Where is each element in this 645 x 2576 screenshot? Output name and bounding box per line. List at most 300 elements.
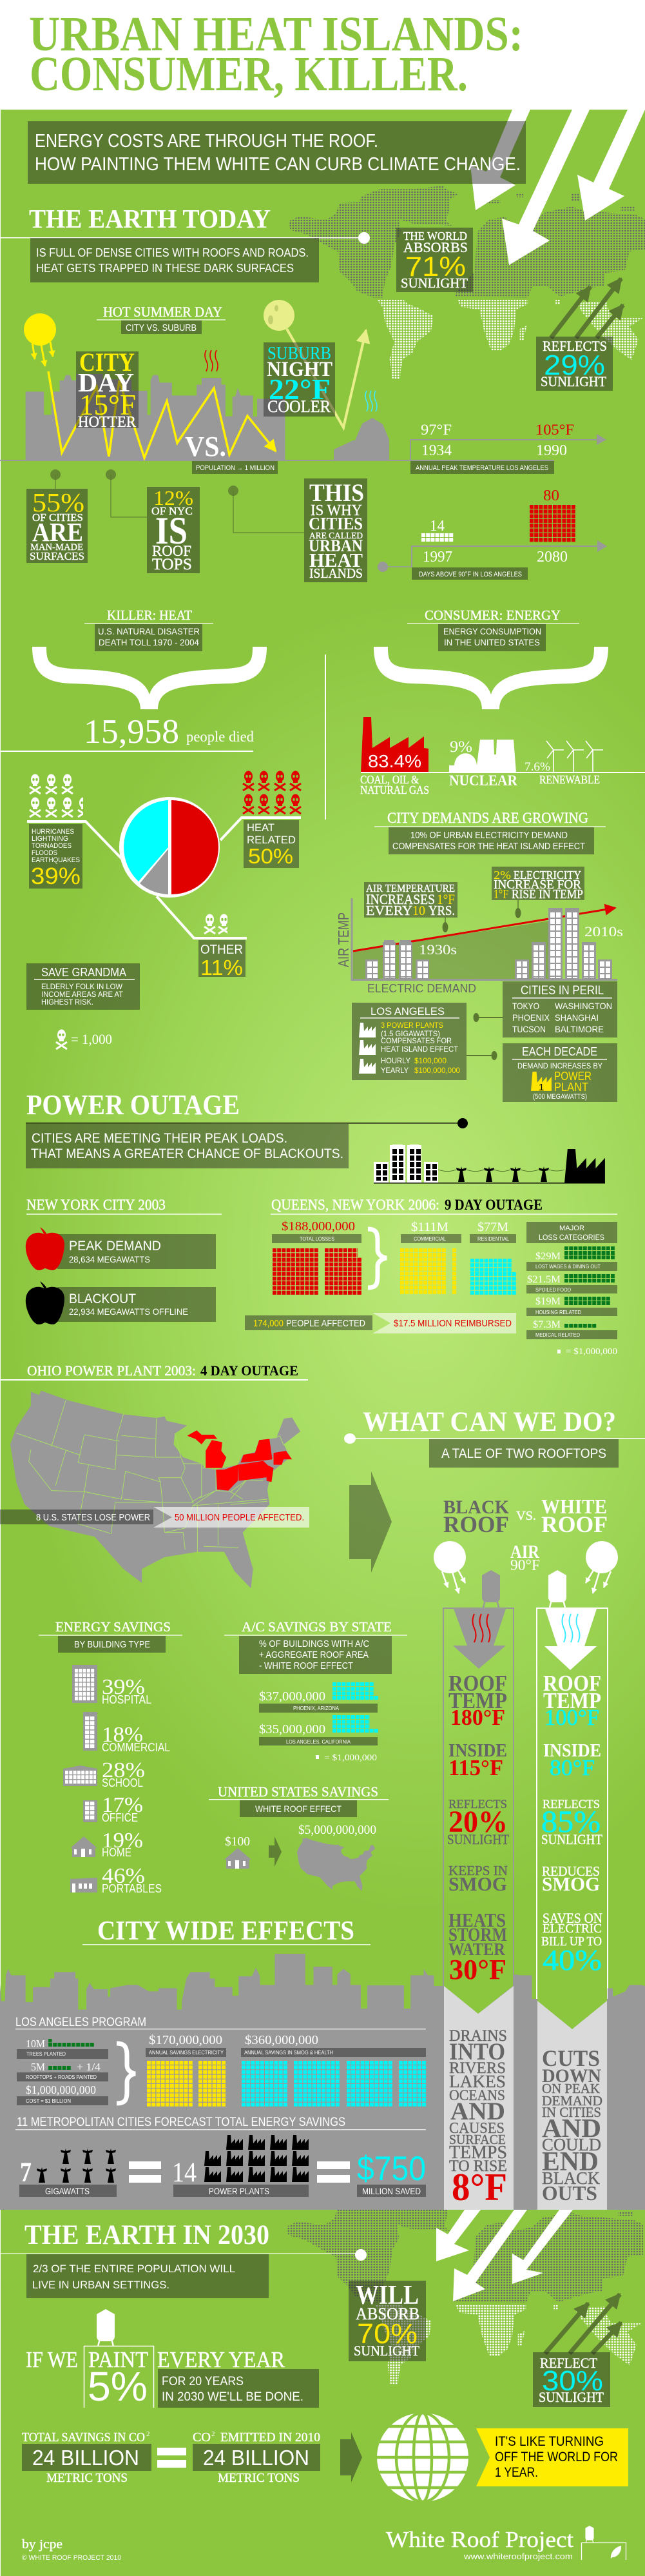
black roof stats: REFLECTS: [448, 1798, 507, 1811]
statement: if we paint 5% every year: PAINT: [88, 2347, 148, 2372]
text: vs: VS.: [185, 431, 226, 462]
panel: major loss categories: $29M: [535, 1251, 561, 1262]
callout: heat related 50%: 50%: [248, 845, 293, 868]
panel: killer heat heading: DEATH TOLL 1970 - 2004: [99, 637, 199, 647]
black roof stats: STORM: [448, 1924, 507, 1945]
white roof stats: REFLECTS: [543, 1798, 600, 1811]
chart: los angeles savings: [259, 1715, 378, 1745]
million saved: $750: [357, 2150, 426, 2188]
heading: hot summer day: CITY VS. SUBURB: [126, 322, 197, 333]
panel: energy savings heading: BY BUILDING TYPE: [74, 1639, 150, 1650]
panel: power outage text: THAT MEANS A GREATER CHANCE OF BLACKOUTS.: [31, 1146, 343, 1161]
chart: days above 90F: 80: [543, 487, 559, 504]
icon: sun over white roof: [586, 1541, 618, 1593]
callout: electricity increase: INCREASE FOR: [494, 878, 582, 892]
callout: reflect 30%: SUNLIGHT: [539, 2389, 604, 2405]
callout: people affected: [245, 1315, 372, 1330]
stat: people died: people died: [186, 729, 254, 745]
panel: major loss categories: MEDICAL RELATED: [535, 1332, 580, 1338]
panel: 11 metropolitan cities: [15, 2116, 426, 2197]
white roof stats: SAVES ON: [543, 1910, 602, 1926]
intro banner: [28, 121, 526, 184]
icon: power grid skyline: [374, 1145, 605, 1184]
smog and health savings grid: $360,000,000: [245, 2033, 318, 2047]
chart: annual peak temperature: 97°F: [421, 422, 452, 438]
white roof runoff text: AND: [542, 2113, 601, 2143]
connectors and dots: [50, 469, 304, 533]
heading: queens 2006: [271, 1197, 617, 1215]
callout: reflect 30%: 30%: [542, 2365, 603, 2397]
stat: office: OFFICE: [102, 1811, 138, 1824]
logo: white roof project: White Roof Project: [386, 2527, 573, 2552]
panel: power outage text: [26, 1124, 349, 1168]
white roof stats: REDUCES: [542, 1863, 600, 1879]
panel: los angeles: LOS ANGELES: [371, 1005, 445, 1018]
callout: world absorbs 71%: THE WORLD: [403, 230, 467, 242]
callout: city day: 15°F: [79, 388, 136, 421]
panel: consumer energy heading: ENERGY CONSUMPTION: [443, 626, 541, 636]
callout: electricity increase: RISE IN TEMP: [512, 887, 583, 901]
icon: brace: [117, 2043, 135, 2103]
panel: power outage text: CITIES ARE MEETING THEIR PEAK LOADS.: [32, 1131, 287, 1146]
callout: 12% of NYC: IS: [155, 509, 188, 552]
stat: commercial: COMMERCIAL: [102, 1741, 170, 1754]
panel: A/C savings heading: % OF BUILDINGS WITH A/C: [259, 1638, 369, 1649]
map: united states blackout: [10, 1391, 300, 1588]
stat: CO2 emitted: METRIC TONS: [218, 2471, 300, 2485]
electricity savings grid: [146, 2033, 226, 2107]
white roof runoff text: DOWN: [542, 2065, 601, 2087]
callout: 55% of cities: [26, 487, 88, 563]
icon: gray water tower: [482, 1570, 500, 1608]
stat: school: SCHOOL: [102, 1776, 143, 1789]
callout: this is why: HEAT: [309, 549, 363, 571]
panel: major loss categories: HOUSING RELATED: [535, 1310, 581, 1315]
black roof stats: SMOG: [448, 1873, 507, 1895]
callout: will absorb 70%: 70%: [357, 2318, 418, 2350]
callout: will absorb 70%: [349, 2281, 426, 2361]
black roof stats: 115°F: [448, 1755, 503, 1780]
callout: this is why: IS WHY: [311, 502, 362, 519]
white roof runoff text: CUTS: [542, 2045, 600, 2071]
dotted world map: 2030: [286, 2191, 643, 2384]
chart: phoenix savings: $37,000,000: [259, 1689, 325, 1704]
callout: 50 million: [153, 1507, 309, 1528]
callout: heat related 50%: HEAT: [247, 821, 274, 834]
heading: ohio power plant: OHIO POWER PLANT 2003:: [27, 1362, 196, 1379]
house: [334, 418, 389, 460]
callout: 55% of cities: 55%: [32, 487, 84, 517]
gigawatts: [19, 2148, 117, 2197]
icon: left curly brace: [32, 647, 267, 709]
gigawatts: GIGAWATTS: [45, 2186, 90, 2196]
icon: red factory 83.4%: 83.4%: [368, 751, 421, 771]
panel: cities in peril: BALTIMORE: [555, 1024, 604, 1034]
icon: wind turbines: [546, 741, 603, 772]
buildings 2010s: [515, 908, 612, 979]
panel: cities in peril: TOKYO: [512, 1001, 539, 1011]
icon: incoming sunlight arrows: [470, 110, 645, 265]
panel: blackout: 22,934 MEGAWATTS OFFLINE: [69, 1306, 188, 1317]
icon: white water tower: [548, 1570, 566, 1608]
power plants: 14: [172, 2158, 197, 2188]
panel: tale of two rooftops: A TALE OF TWO ROOFTOPS: [441, 1446, 606, 1461]
trees planted: TREES PLANTED: [26, 2050, 66, 2057]
callout: reflects 29%: SUNLIGHT: [541, 373, 607, 389]
chart: los angeles savings: LOS ANGELES, CALIFORNIA: [286, 1739, 351, 1745]
callout: reflects 29%: [536, 337, 613, 391]
panel: cities in peril: WASHINGTON: [555, 1001, 612, 1011]
callout: this is why: [304, 478, 367, 582]
black roof runoff text: OCEANS: [449, 2087, 505, 2103]
label: 7.6%: 7.6%: [525, 760, 550, 774]
energy source labels: NUCLEAR: [449, 772, 517, 789]
legend: queens unit: = $1,000,000: [566, 1347, 617, 1357]
callout: city day: CITY: [79, 348, 135, 377]
callout: suburb night: NIGHT: [267, 358, 332, 381]
black roof runoff text: LAKES: [449, 2072, 506, 2091]
panel: peak demand: 28,634 MEGAWATTS: [69, 1254, 150, 1264]
smog and health savings grid: ANNUAL SAVINGS IN SMOG & HEALTH: [244, 2049, 333, 2056]
white roof runoff text: OUTS: [542, 2181, 597, 2205]
callout: people affected: 174,000: [253, 1318, 284, 1329]
title: CONSUMER, KILLER.: [30, 47, 468, 101]
panel: save grandma: [26, 963, 140, 1010]
panel: united states savings: $100: [225, 1834, 250, 1849]
trees planted: [17, 2038, 108, 2059]
callout: natural disasters 39%: EARTHQUAKES: [32, 856, 80, 864]
callout: natural disasters 39%: LIGHTNING: [32, 835, 68, 843]
ground line: [0, 460, 554, 461]
callout: turning off the world: [476, 2428, 628, 2486]
rooftops painted: [17, 2061, 108, 2081]
title: [29, 7, 523, 101]
stat: portables: PORTABLES: [102, 1882, 162, 1895]
legend: skull equals 1,000: [56, 1029, 112, 1049]
energy source labels: NATURAL GAS: [360, 783, 429, 796]
callout: this is why: THIS: [309, 479, 364, 507]
intro banner: HOW PAINTING THEM WHITE CAN CURB CLIMATE CHANGE.: [35, 154, 521, 175]
panel: 2/3 of population: [26, 2254, 269, 2298]
panel: cities in peril: TUCSON: [512, 1024, 546, 1034]
chart: residential losses: [470, 1220, 517, 1295]
black roof runoff text: 8°F: [452, 2166, 507, 2208]
panel: each decade: EACH DECADE: [522, 1045, 597, 1058]
callout: reimbursed: [372, 1313, 516, 1333]
callout: suburb night: COOLER: [267, 397, 331, 416]
panel: for 20 years: IN 2030 WE'LL BE DONE.: [162, 2390, 303, 2404]
stat: commercial: 18%: [102, 1723, 143, 1747]
callout: 8 states: [0, 1509, 153, 1524]
suburb reflection line: [287, 329, 366, 428]
callout: air temperature: 1°F: [437, 891, 455, 907]
panel: los angeles: $100,000,000: [414, 1066, 460, 1075]
stat: CO2 emitted: [193, 2430, 320, 2485]
panel: A/C savings heading: + AGGREGATE ROOF AREA: [259, 1649, 369, 1660]
callout: people affected: PEOPLE AFFECTED: [286, 1318, 365, 1329]
panel: earth today text: HEAT GETS TRAPPED IN THESE DARK SURFACES: [36, 262, 294, 275]
stat: CO2 emitted: CO: [193, 2430, 211, 2444]
black roof stats: TEMP: [448, 1688, 507, 1713]
panel: major loss categories: LOST WAGES & DINING OUT: [535, 1264, 601, 1270]
heat squiggles: suburb: [365, 391, 377, 411]
chart: days above 90F: DAYS ABOVE 90°F IN LOS ANGELES: [419, 571, 522, 578]
white roof runoff text: [542, 2045, 602, 2205]
chart: annual peak temperature: ANNUAL PEAK TEMPERATURE LOS ANGELES: [416, 464, 548, 472]
callout: 8 states: 8 U.S. STATES LOSE POWER: [36, 1512, 150, 1523]
callout: turning off the world: IT'S LIKE TURNING: [495, 2434, 604, 2449]
white roof stats: 100°F: [544, 1705, 599, 1730]
white roof stats: SMOG: [542, 1873, 600, 1895]
callout: air temperature: INCREASES: [366, 891, 435, 907]
callout: will absorb 70%: SUNLIGHT: [354, 2343, 420, 2359]
chart: queens total losses: $188,000,000: [282, 1219, 355, 1234]
heat squiggles: city: [205, 350, 218, 371]
white roof runoff text: IN CITIES: [542, 2104, 601, 2120]
heading: black vs white roof: ROOF: [541, 1511, 608, 1537]
credits: by jcpe: [22, 2537, 63, 2551]
label: air 90F: [510, 1542, 540, 1574]
black roof stats: ROOF: [448, 1671, 507, 1696]
stat: total savings: [22, 2430, 151, 2485]
callout: 12% of NYC: 12%: [153, 486, 193, 509]
callout: 55% of cities: SURFACES: [30, 550, 84, 562]
trees planted: 10M: [26, 2038, 45, 2050]
icon: reflected sunlight arrows: [551, 279, 623, 338]
icon: red factory 83.4%: [361, 717, 428, 772]
icon: sun: [24, 313, 56, 366]
vertical divider: [325, 654, 326, 820]
callout: natural disasters 39%: TORNADOES: [32, 842, 72, 850]
panel: los angeles: HEAT ISLAND EFFECT: [381, 1045, 459, 1054]
panel: 2/3 of population: LIVE IN URBAN SETTINGS.: [32, 2279, 169, 2291]
panel: cities in peril: PHOENIX: [512, 1012, 550, 1023]
white roof stats: BILL UP TO: [541, 1934, 602, 1949]
callout: air temperature: YRS.: [428, 903, 455, 918]
stat: commercial: [83, 1712, 170, 1754]
stat: people died: 15,958: [84, 713, 179, 751]
callout: this is why: ARE CALLED: [309, 531, 363, 541]
callout: 12% of NYC: OF NYC: [151, 505, 193, 517]
heading: queens 2006: 9 DAY OUTAGE: [445, 1197, 543, 1213]
white roof stats: ELECTRIC: [543, 1922, 602, 1936]
black roof runoff column: [444, 1960, 514, 2210]
heading: the earth today: THE EARTH TODAY: [29, 204, 271, 233]
heading: ohio power plant: [0, 1362, 308, 1381]
legend: A/C unit: = $1,000,000: [324, 1753, 377, 1763]
icon: moon: [264, 300, 294, 331]
panel: los angeles program: [15, 2016, 427, 2107]
callout: turning off the world: 1 YEAR.: [495, 2465, 538, 2480]
energy source labels: [360, 772, 600, 796]
panel: major loss categories: $21.5M: [527, 1274, 561, 1285]
stat: portables: 46%: [102, 1864, 145, 1888]
chart: air temp vs electric demand: [335, 898, 623, 995]
heading: black vs white roof: WHITE: [541, 1495, 607, 1518]
panel: each decade: 1: [539, 1082, 544, 1093]
program cost: COST = $1 BILLION: [26, 2098, 71, 2104]
chart: residential losses: RESIDENTIAL: [477, 1236, 510, 1242]
stat: total savings: METRIC TONS: [46, 2471, 128, 2485]
program cost: $1,000,000,000: [26, 2083, 96, 2096]
stat: hospital: HOSPITAL: [102, 1693, 151, 1706]
heat squiggles black roof: [473, 1614, 490, 1642]
panel: los angeles: $100,000: [414, 1056, 447, 1065]
callout: air temperature: [364, 882, 457, 932]
panel: 2/3 of population: 2/3 OF THE ENTIRE POPULATION WILL: [33, 2263, 235, 2275]
panel: killer heat heading: U.S. NATURAL DISASTER: [98, 626, 200, 636]
panel: earth today text: IS FULL OF DENSE CITIES WITH ROOFS AND ROADS.: [36, 246, 309, 259]
rule with dot: [26, 1118, 468, 1128]
black roof stats: 30°F: [449, 1954, 506, 1985]
label: air 90F: AIR: [510, 1542, 540, 1562]
panel: los angeles: 3 POWER PLANTS: [381, 1021, 443, 1030]
panel: energy savings heading: ENERGY SAVINGS: [55, 1619, 171, 1635]
black roof stats: SUNLIGHT: [447, 1831, 509, 1847]
panel: consumer energy heading: [407, 607, 579, 651]
chart: deaths pie: [119, 797, 220, 898]
panel: 11 metropolitan cities: 11 METROPOLITAN CITIES FORECAST TOTAL ENERGY SAVINGS: [17, 2116, 345, 2129]
stat: total savings: 24 BILLION: [32, 2446, 139, 2470]
black roof stats: INSIDE: [448, 1740, 507, 1761]
stat: home: [70, 1829, 143, 1859]
panel: each decade: [503, 1043, 617, 1102]
heading: new york city 2003: NEW YORK CITY 2003: [26, 1197, 166, 1213]
chart: days above 90F: 1997: [423, 549, 452, 565]
heading: city demands: 10% OF URBAN ELECTRICITY DEMAND: [410, 830, 568, 841]
callout: reflect 30%: [533, 2352, 610, 2407]
stat: people died: [0, 713, 254, 752]
callout: will absorb 70%: WILL: [356, 2281, 419, 2310]
million saved: MILLION SAVED: [362, 2186, 421, 2196]
rule with dot: [344, 1433, 645, 1444]
black roof runoff text: TO RISE: [449, 2158, 507, 2175]
panel: blackout: [26, 1281, 216, 1324]
callout: turning off the world: OFF THE WORLD FOR: [495, 2450, 618, 2464]
pie callout lines: [27, 818, 301, 938]
arrow: to globe: [340, 2432, 362, 2483]
zigzag heat line: [48, 371, 276, 458]
callout: suburb night: [264, 342, 335, 417]
heading rule with dot: [0, 232, 370, 244]
panel: each decade: POWER: [554, 1070, 592, 1083]
black roof stats: KEEPS IN: [448, 1863, 508, 1878]
callout: 12% of NYC: [147, 486, 200, 573]
logo: white roof project: [386, 2526, 626, 2561]
callout: other 11%: 11%: [200, 956, 243, 979]
white roof runoff text: END: [542, 2147, 599, 2177]
white roof runoff text: BLACK: [542, 2168, 600, 2188]
stat: CO2 emitted: 24 BILLION: [203, 2446, 309, 2470]
electricity savings grid: $170,000,000: [149, 2033, 222, 2047]
chart: commercial losses: [400, 1220, 461, 1295]
icon: incoming sunlight arrows 2030: [436, 2210, 573, 2301]
equals sign: [129, 2161, 161, 2183]
icon: reflected sunlight arrows 2030: [545, 2294, 621, 2354]
heading: hot summer day: HOT SUMMER DAY: [103, 304, 222, 320]
black roof runoff text: [449, 2027, 507, 2208]
white roof stats: SUNLIGHT: [541, 1831, 602, 1847]
stat: CO2 emitted: EMITTED IN 2010: [220, 2430, 320, 2444]
title: URBAN HEAT ISLANDS:: [29, 7, 523, 61]
heading: black vs white roof: BLACK: [443, 1497, 510, 1518]
heading: city demands: COMPENSATES FOR THE HEAT ISLAND EFFECT: [392, 841, 585, 852]
callout: electricity increase: 1°F: [494, 887, 508, 901]
city wide skyline: [0, 1954, 645, 2210]
stat: office: 17%: [102, 1793, 143, 1817]
chart: queens total losses: [272, 1219, 362, 1295]
credits: [22, 2537, 121, 2562]
stat: total savings: TOTAL SAVINGS IN CO: [22, 2430, 145, 2444]
chart: air temp vs electric demand: 1930s: [419, 941, 457, 958]
energy baseline: [361, 772, 645, 773]
panel: los angeles: YEARLY: [381, 1066, 409, 1075]
heading: city demands: [374, 810, 606, 854]
black roof runoff text: CAUSES: [449, 2120, 505, 2137]
rooftops painted: + 1/4: [77, 2061, 101, 2073]
panel: each decade: PLANT: [554, 1081, 588, 1094]
white roof stats: 80°F: [550, 1755, 595, 1780]
legend: skull equals 1,000: = 1,000: [71, 1031, 112, 1047]
panel: consumer energy heading: IN THE UNITED STATES: [444, 637, 540, 647]
chart: annual peak temperature: [410, 422, 606, 474]
white roof stats: TEMP: [543, 1688, 601, 1713]
callout: 55% of cities: ARE: [32, 517, 83, 547]
statement: if we paint 5% every year: 5%: [88, 2363, 148, 2410]
equals sign: [317, 2161, 350, 2183]
panel: major loss categories: [526, 1222, 617, 1339]
panel: major loss categories: $7.3M: [533, 1319, 561, 1330]
callout: 12% of NYC: TOPS: [152, 556, 192, 573]
panel: blackout: BLACKOUT: [69, 1292, 136, 1306]
energy source labels: COAL, OIL &: [360, 773, 419, 786]
white roof runoff column: [537, 1992, 607, 2210]
panel: major loss categories: MAJOR: [559, 1224, 584, 1232]
label: population: [192, 461, 278, 474]
panel: killer heat heading: KILLER: HEAT: [107, 607, 192, 623]
credits: © WHITE ROOF PROJECT 2010: [22, 2554, 121, 2562]
icon: queens brace: [368, 1229, 387, 1288]
callout: air temperature: EVERY: [366, 903, 412, 918]
callout: reimbursed: $17.5 MILLION REIMBURSED: [394, 1318, 512, 1329]
panel: united states savings: $5,000,000,000: [298, 1823, 376, 1837]
white roof stats: 40%: [543, 1943, 602, 1976]
white roof runoff text: DEMAND: [542, 2093, 602, 2109]
panel: killer heat heading: [84, 607, 213, 651]
panel: save grandma: HIGHEST RISK.: [41, 998, 93, 1007]
callout: reflects 29%: 29%: [544, 349, 605, 381]
chart: air temp vs electric demand: 2010s: [584, 923, 623, 939]
panel: los angeles: (1.5 GIGAWATTS): [381, 1029, 440, 1038]
stat: portables: [70, 1864, 162, 1895]
callout: air temperature: 10: [412, 903, 425, 918]
heading: black vs white roof: VS.: [516, 1509, 536, 1523]
callout: will absorb 70%: ABSORB: [356, 2305, 419, 2323]
chart: queens total losses: TOTAL LOSSES: [300, 1236, 334, 1242]
panel: each decade: (500 MEGAWATTS): [533, 1093, 587, 1101]
rooftops painted: 5M: [31, 2061, 45, 2073]
white roof runoff text: ON PEAK: [542, 2081, 600, 2096]
electricity savings grid: ANNUAL SAVINGS ELECTRICITY: [149, 2049, 224, 2056]
icon: nuclear plant: 9%: [450, 738, 472, 756]
panel: earth today text: [30, 238, 319, 282]
panel: consumer energy heading: CONSUMER: ENERGY: [425, 607, 561, 623]
callout: this is why: URBAN: [309, 536, 363, 555]
panel: united states savings: [209, 1784, 389, 1891]
callout: electricity increase: 2%: [494, 869, 511, 881]
callout: other 11%: OTHER: [200, 943, 243, 957]
callout: world absorbs 71%: 71%: [405, 251, 466, 282]
